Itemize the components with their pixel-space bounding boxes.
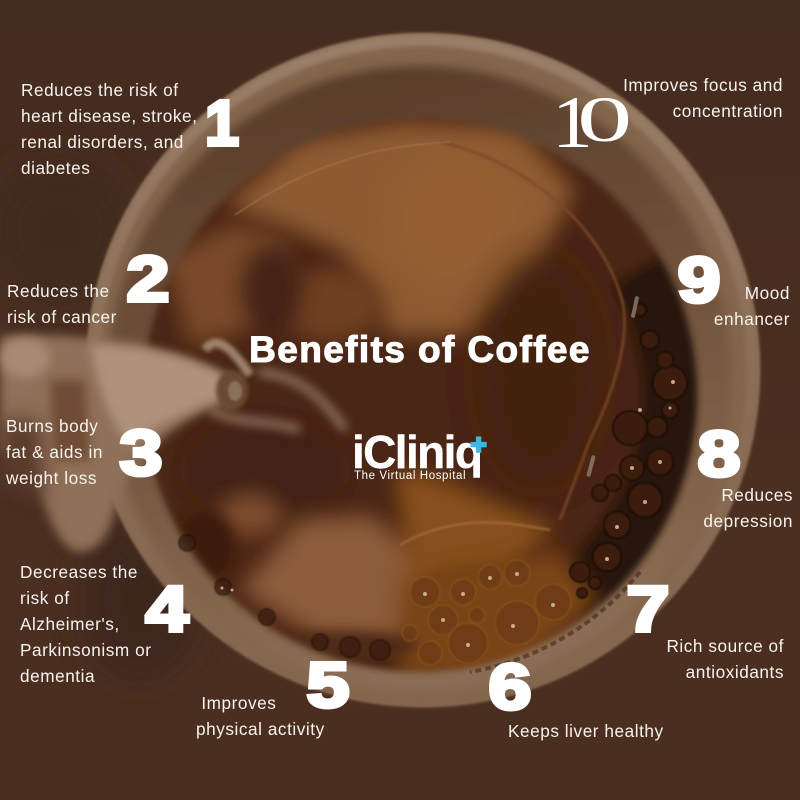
benefit 2 text (7, 281, 117, 327)
benefit 8 text: depression (703, 511, 793, 531)
benefit 9 text (714, 283, 790, 329)
benefit 7 text (666, 636, 784, 682)
benefit 1 text: diabetes (21, 158, 90, 178)
benefit 4 text (20, 562, 151, 686)
benefit 4 text: dementia (20, 666, 95, 686)
benefit 3 text (6, 416, 103, 488)
number 5: 5 (307, 649, 349, 721)
benefit 4 text: Alzheimer's, (20, 614, 120, 634)
benefit 10 text (623, 75, 783, 121)
title: Benefits of Coffee (249, 329, 591, 370)
benefit 6 text: Keeps liver healthy (508, 721, 664, 741)
benefit 3 text: weight loss (6, 468, 97, 488)
coffee surface (130, 100, 710, 690)
benefit 3 text: Burns body (6, 416, 98, 436)
benefit 2 text: risk of cancer (7, 307, 117, 327)
benefit 10 text: concentration (673, 101, 783, 121)
logo wordmark: iCliniq (352, 426, 481, 478)
number 10: 1 (552, 82, 593, 164)
logo tagline: The Virtual Hospital (354, 470, 466, 482)
benefit 8 text (703, 485, 793, 531)
milk pour (0, 335, 345, 552)
benefit 4 text: Parkinsonism or (20, 640, 151, 660)
benefit 7 text: Rich source of (666, 636, 784, 656)
benefit 1 text: heart disease, stroke, (21, 106, 197, 126)
benefit 9 text: Mood (745, 283, 790, 303)
number 9: 9 (678, 244, 720, 316)
benefit 1 text: Reduces the risk of (21, 80, 179, 100)
number 10: 0 (577, 84, 632, 156)
benefit 5 text: physical activity (196, 719, 325, 739)
icon: plus (470, 436, 487, 453)
benefit 5 text (196, 693, 325, 739)
cup rim (86, 33, 760, 707)
swirl lines (440, 142, 624, 520)
benefit 8 text: Reduces (721, 485, 793, 505)
number 3: 3 (120, 417, 162, 489)
number 6: 6 (489, 651, 531, 723)
benefit 1 text: renal disorders, and (21, 132, 184, 152)
benefit 7 text: antioxidants (686, 662, 784, 682)
benefit 3 text: fat & aids in (6, 442, 103, 462)
bubbles: orange (402, 560, 571, 665)
number 2: 2 (127, 243, 169, 315)
number 8: 8 (698, 418, 740, 490)
benefit 5 text: Improves (201, 693, 276, 713)
number 10 (552, 82, 632, 164)
bubble highlights (220, 380, 675, 647)
benefit 10 text: Improves focus and (623, 75, 783, 95)
benefit 4 text: risk of (20, 588, 70, 608)
benefit 9 text: enhancer (714, 309, 790, 329)
benefit 2 text: Reduces the (7, 281, 110, 301)
number 4: 4 (146, 573, 188, 645)
cup lettering ring (470, 572, 640, 672)
number 7: 7 (627, 573, 669, 645)
benefit 1 text (21, 80, 197, 178)
bubbles: dark (179, 304, 687, 660)
number 1: 1 (205, 87, 239, 159)
benefit 4 text: Decreases the (20, 562, 138, 582)
logo: iCliniq (352, 426, 487, 482)
